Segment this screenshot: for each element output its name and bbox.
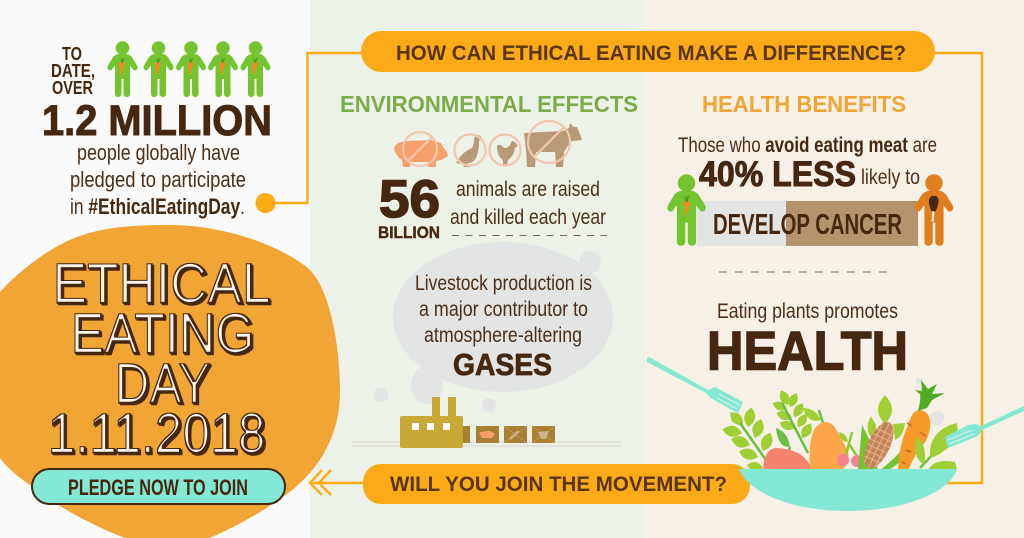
icon: right fork [945, 406, 1024, 448]
meat avoidance text: 40% LESS [699, 155, 856, 194]
plants promote health text: HEALTH [707, 320, 908, 382]
event title: EATING [71, 302, 255, 366]
livestock text block: Livestock production is [415, 272, 592, 295]
smoke cloud [374, 242, 613, 412]
to date over label: TO [62, 44, 82, 64]
event title: ETHICAL [53, 252, 271, 316]
plants promote health text: Eating plants promotes [717, 300, 898, 323]
salad bowl illustration [722, 378, 958, 511]
icon: goose [454, 134, 486, 167]
icon: cow [524, 121, 582, 167]
icon: pig [394, 132, 448, 167]
icons: five green people with carrots [108, 41, 270, 97]
bottom banner [363, 464, 750, 504]
heading: health benefits: HEALTH BENEFITS [702, 91, 906, 117]
heading: environmental effects: ENVIRONMENTAL EFFECTS [340, 91, 638, 117]
background: left panel [0, 0, 310, 538]
meat avoidance text: Those who avoid eating meat are [678, 134, 937, 157]
livestock text block: a major contributor to [419, 298, 588, 321]
stat description [450, 178, 606, 229]
connector line: left from top banner to hashtag dot [256, 53, 362, 213]
top banner [361, 31, 935, 72]
livestock text block [415, 272, 592, 382]
headline: 1.2 million: 1.2 MILLION [42, 97, 272, 145]
background: middle panel [310, 0, 645, 538]
icon: orange person with chicken leg [915, 174, 953, 246]
to date over label [51, 44, 95, 98]
pledge text block: people globally have [77, 140, 240, 165]
stat description: animals are raised [456, 178, 600, 201]
event title: 1.11.2018 [48, 402, 266, 466]
orange blob [0, 225, 340, 538]
pledge text block: pledged to participate [70, 167, 246, 192]
event title [48, 252, 271, 466]
stat: 56 billion: 56 [379, 170, 440, 229]
connector line: right from top banner to bottom banner [934, 53, 982, 483]
pledge button: PLEDGE NOW TO JOIN [68, 475, 248, 500]
pledge text block: in #EthicalEatingDay. [70, 194, 245, 219]
meat avoidance text: likely to [861, 166, 920, 189]
arrow: pointing to pledge button [310, 470, 364, 495]
event title: DAY [115, 352, 211, 416]
bowl [739, 469, 957, 511]
pledge button [32, 469, 285, 504]
to date over label: DATE, [51, 61, 95, 81]
to date over label: OVER [52, 78, 93, 98]
factory illustration [352, 397, 622, 448]
stat: 56 billion: BILLION [378, 224, 440, 242]
icon: green person with carrot [667, 174, 706, 246]
meat avoidance text [678, 134, 937, 194]
stat description: and killed each year [450, 206, 606, 229]
icon: left fork [647, 358, 743, 413]
livestock text block: GASES [453, 347, 552, 382]
pledge text block [70, 140, 246, 219]
top banner: HOW CAN ETHICAL EATING MAKE A DIFFERENCE? [396, 42, 906, 65]
bar: develop cancer [697, 201, 918, 246]
livestock text block: atmosphere-altering [424, 324, 582, 347]
vegetables [722, 378, 958, 472]
icons: crossed out animals [394, 121, 582, 167]
bar: develop cancer: DEVELOP CANCER [713, 209, 902, 241]
icon: chicken [490, 134, 520, 166]
background: right panel [645, 0, 1024, 538]
bottom banner: WILL YOU JOIN THE MOVEMENT? [390, 473, 727, 496]
